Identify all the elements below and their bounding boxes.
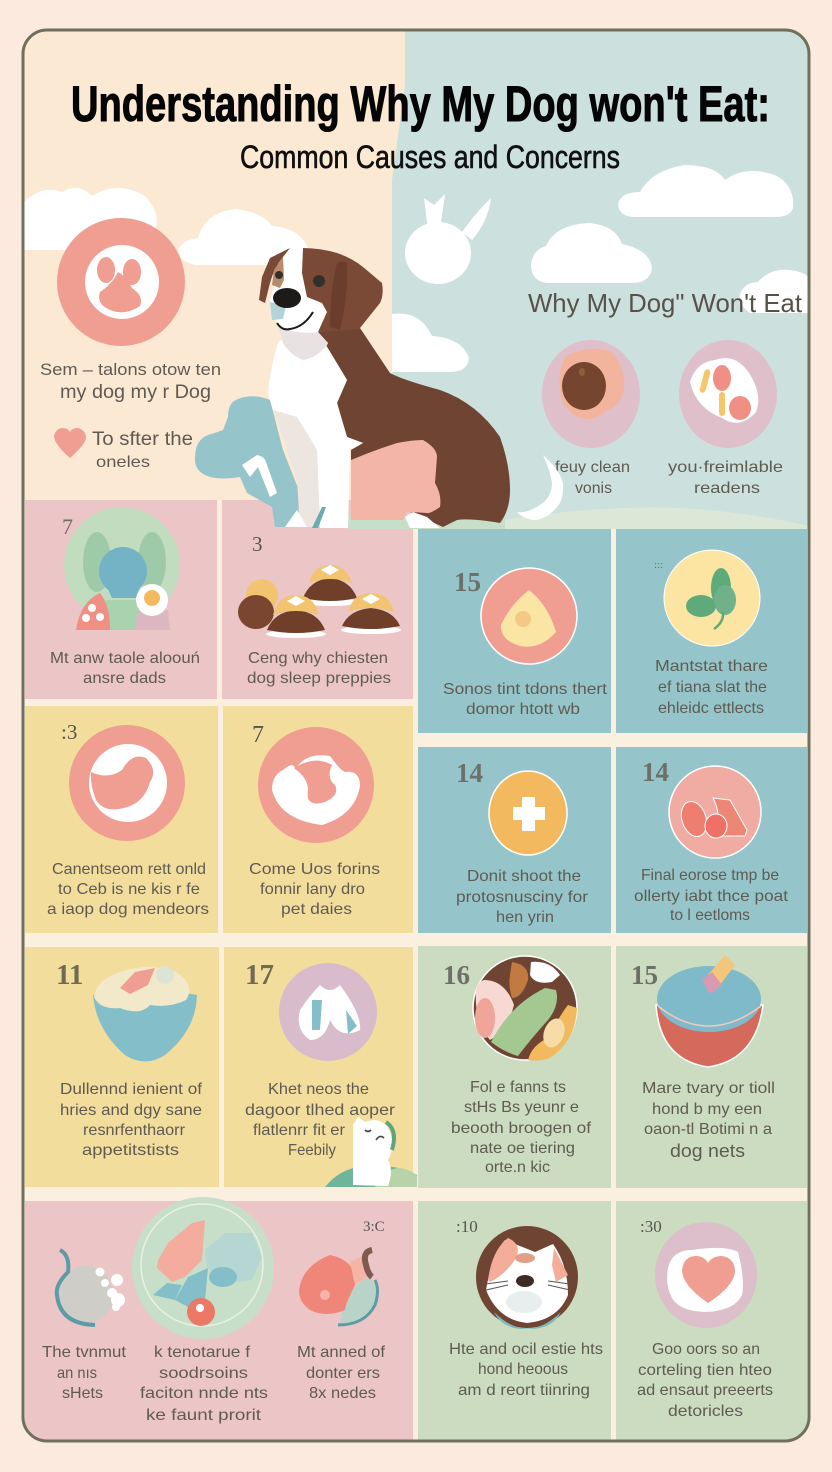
icon: food bowls xyxy=(238,565,401,638)
icon: rice bowl xyxy=(93,966,197,1062)
caption: stHs Bs yeunr e xyxy=(464,1099,579,1116)
heart text xyxy=(92,431,192,467)
number: 16 xyxy=(443,960,470,990)
caption: Sonos tint tdons thert xyxy=(443,681,608,698)
panel: green 16 xyxy=(418,946,611,1188)
dog eye patch xyxy=(272,257,284,288)
icon: heart in blob xyxy=(655,1222,757,1328)
panel: row 1 pink right xyxy=(222,500,413,699)
icon: pink circle with white shape xyxy=(258,727,374,843)
caption xyxy=(642,1080,775,1161)
dog thigh xyxy=(351,440,440,520)
blue tree shape xyxy=(195,396,300,527)
icon: cheese xyxy=(481,568,577,664)
dog mouth xyxy=(277,312,313,329)
caption: ansre dads xyxy=(83,670,166,687)
caption: appetitstists xyxy=(82,1142,179,1159)
caption: Ceng why chiesten xyxy=(248,650,388,667)
icon: treats in mauve circle xyxy=(679,340,777,448)
number: 14 xyxy=(456,758,483,788)
panel: row 2 yellow left xyxy=(25,706,218,933)
dog chin xyxy=(278,327,328,360)
subtitle: Common Causes and Concerns xyxy=(240,139,620,175)
caption: a iaop dog mendeors xyxy=(47,901,209,918)
captions xyxy=(42,1344,386,1424)
caption: hond heoous xyxy=(478,1361,568,1378)
panel: row 2 yellow right xyxy=(223,706,413,933)
caption: fonnir lany dro xyxy=(260,881,365,898)
panel: yellow 17 xyxy=(224,947,413,1187)
caption: ehleidc ettlects xyxy=(658,700,764,717)
panel: pink wide xyxy=(25,1197,413,1441)
caption: corteling tien hteo xyxy=(638,1362,772,1379)
dog eyes xyxy=(275,271,325,287)
bunny silhouette xyxy=(405,194,491,284)
number: 15 xyxy=(454,567,481,597)
panel: teal leaf xyxy=(616,529,807,733)
dog back paw xyxy=(405,512,440,528)
icon: mauve circle xyxy=(279,963,377,1061)
panel: teal 15 xyxy=(418,529,611,733)
captions: The tvnmut xyxy=(42,1344,127,1361)
caption: Dullennd ienient of xyxy=(60,1081,203,1098)
caption: hen yrin xyxy=(496,909,554,926)
caption xyxy=(637,1341,773,1420)
icon: water bowl xyxy=(656,955,763,1067)
heart text: To sfter the xyxy=(92,429,193,450)
captions: sHets xyxy=(62,1385,103,1402)
caption xyxy=(51,652,199,683)
caption: beooth broogen of xyxy=(451,1120,592,1137)
captions: an nıs xyxy=(57,1365,97,1382)
caption: resnrfenthaorr xyxy=(83,1122,186,1139)
caption: nate oe tiering xyxy=(470,1140,575,1157)
illustration: dog xyxy=(242,244,563,529)
right heading: Why My Dog" Won't Eat xyxy=(528,288,803,318)
dog leg strip xyxy=(312,507,326,528)
caption: dog nets xyxy=(670,1141,745,1161)
number: 15 xyxy=(631,960,658,990)
icon: pink circle with white tummy xyxy=(69,725,185,841)
dog right ear stripe xyxy=(330,262,347,330)
caption xyxy=(456,868,589,926)
caption: to Ceb is ne kis r fe xyxy=(58,881,200,898)
panel: green heart xyxy=(616,1201,807,1441)
captions: ke faunt prorit xyxy=(146,1407,262,1424)
captions: Mt anned of xyxy=(297,1344,386,1361)
caption xyxy=(245,1081,396,1159)
caption: ad ensaut preeerts xyxy=(637,1382,773,1399)
icon: leaf xyxy=(664,550,760,646)
dog muzzle xyxy=(270,302,286,320)
number: ::: xyxy=(654,559,663,571)
caption xyxy=(60,1081,203,1159)
number: 7 xyxy=(62,514,73,539)
dog body xyxy=(318,328,510,527)
left intro text xyxy=(40,363,220,402)
captions: donter ers xyxy=(306,1365,380,1382)
caption xyxy=(634,867,789,924)
caption: flatlenrr fit er xyxy=(253,1122,346,1139)
caption: Canentseom rett onld xyxy=(52,861,206,878)
number: 11 xyxy=(56,959,83,991)
clouds xyxy=(23,165,809,372)
dog rear leg shade xyxy=(273,410,320,527)
caption: hries and dgy sane xyxy=(60,1102,202,1119)
panel: green cat xyxy=(418,1201,611,1441)
caption: hond b my een xyxy=(652,1101,762,1118)
caption xyxy=(47,861,209,918)
caption xyxy=(247,650,391,687)
number: 17 xyxy=(245,959,274,991)
panel: teal meat xyxy=(616,747,807,933)
right intro captions xyxy=(555,460,782,493)
icon: cat face xyxy=(476,1226,578,1329)
collar strap xyxy=(242,455,277,497)
caption xyxy=(655,658,768,717)
caption: Mare tvary or tioll xyxy=(642,1080,775,1097)
right intro captions: vonis xyxy=(575,480,612,497)
icon: meat xyxy=(669,766,761,858)
caption: ef tiana slat the xyxy=(658,679,767,696)
number: 7 xyxy=(252,722,264,748)
panel: teal medical xyxy=(418,747,611,933)
caption: Donit shoot the xyxy=(467,868,581,885)
right intro captions: you·freimlable xyxy=(668,459,783,476)
caption xyxy=(249,861,380,918)
panel: yellow 11 xyxy=(25,947,219,1187)
caption: domor htott wb xyxy=(466,701,580,718)
caption xyxy=(443,681,608,718)
caption: oaon-tl Botimi n a xyxy=(644,1121,772,1138)
caption: am d reort tiinring xyxy=(458,1382,590,1399)
captions: faciton nnde nts xyxy=(140,1385,268,1402)
number: :3 xyxy=(61,720,77,744)
icon: paw in pink circle xyxy=(57,218,185,346)
icon: small sleepy dog on mound xyxy=(325,1117,417,1187)
caption xyxy=(449,1341,603,1399)
number: 3:C xyxy=(363,1219,385,1235)
caption: detoricles xyxy=(668,1403,743,1420)
caption: Mantstat thare xyxy=(655,658,768,675)
number: :10 xyxy=(456,1217,478,1236)
panel: row 1 pink left xyxy=(25,500,217,699)
right intro captions: readens xyxy=(694,480,760,497)
caption: orte.n kic xyxy=(485,1159,550,1176)
captions: 8x nedes xyxy=(309,1385,376,1402)
caption: Feebily xyxy=(288,1142,336,1159)
panel: green 15 xyxy=(616,946,807,1188)
dog face xyxy=(270,258,328,346)
dog head xyxy=(302,248,383,332)
left intro text: my dog my r Dog xyxy=(60,382,211,403)
right intro captions: feuy clean xyxy=(555,459,630,476)
icon: pink organ right xyxy=(299,1250,378,1325)
dog nose xyxy=(273,288,301,308)
caption: dog sleep preppies xyxy=(247,670,391,687)
caption: pet daies xyxy=(281,901,352,918)
caption: Goo oors so an xyxy=(652,1341,760,1358)
caption: ollerty iabt thce poat xyxy=(634,888,789,905)
caption: Hte and ocil estie hts xyxy=(449,1341,603,1358)
caption: Mt anw taole aloouń xyxy=(50,650,200,667)
header background xyxy=(24,32,808,529)
icon: heart xyxy=(54,428,86,458)
icon: large plate xyxy=(132,1197,274,1339)
ground under dog xyxy=(347,516,505,529)
captions: k tenotarue f xyxy=(154,1344,251,1361)
captions: soodrsoins xyxy=(159,1365,248,1382)
number: 3 xyxy=(252,532,262,556)
icon: food in mauve circle xyxy=(542,340,640,448)
icon: plant figure xyxy=(64,507,180,630)
number: 14 xyxy=(642,757,669,787)
caption: Fol e fanns ts xyxy=(470,1079,566,1096)
caption: Final eorose tmp be xyxy=(641,867,779,884)
heart text: oneles xyxy=(96,454,150,471)
icon: plus xyxy=(489,771,567,855)
icon: mixed food xyxy=(473,956,577,1061)
caption: dagoor tlhed aoper xyxy=(245,1102,396,1119)
caption: to l eetloms xyxy=(670,907,750,924)
caption: Come Uos forins xyxy=(249,861,380,878)
dog chest and legs xyxy=(268,330,363,528)
caption: Khet neos the xyxy=(268,1081,369,1098)
icon: yarn ball left xyxy=(57,1250,125,1325)
dog left ear xyxy=(259,248,290,303)
dog tail xyxy=(517,455,563,520)
number: :30 xyxy=(640,1217,662,1236)
caption xyxy=(451,1079,592,1176)
left intro text: Sem – talons otow ten xyxy=(40,360,221,379)
caption: protosnusciny for xyxy=(456,889,589,906)
dog small paw xyxy=(285,510,307,527)
